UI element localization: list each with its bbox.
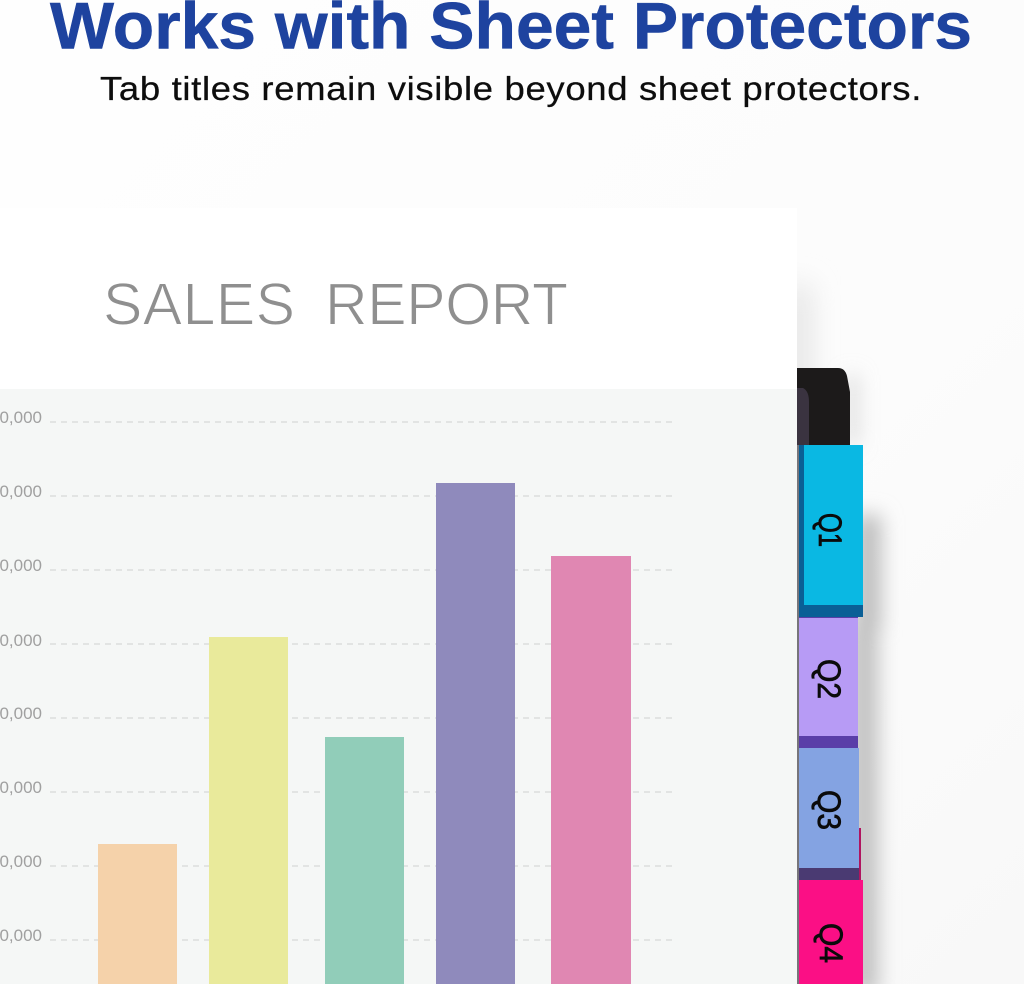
bar chart: 0,000 [0, 556, 42, 575]
black tab [797, 368, 850, 445]
tab shadows [848, 375, 881, 984]
tab Q4: Q4 [813, 923, 849, 963]
tab Q2 [799, 617, 858, 750]
tab Q1 [799, 445, 863, 617]
chart panel [0, 389, 797, 984]
sheet edge [797, 445, 799, 984]
tab Q3 [799, 748, 859, 880]
report page [0, 208, 797, 984]
bar chart: 0,000 [0, 852, 42, 871]
tab Q1: Q1 [812, 513, 848, 547]
report heading [103, 272, 568, 338]
bar chart: 0,000 [0, 631, 42, 650]
bar chart: 0,000 [0, 778, 42, 797]
bar chart: 0,000 [0, 482, 42, 501]
bar chart: 0,000 [0, 704, 42, 723]
tab Q4 [799, 828, 863, 984]
report heading: SALES [103, 272, 295, 338]
sheet shadow [786, 285, 810, 445]
tab Q3: Q3 [811, 790, 847, 830]
bar chart [0, 408, 672, 984]
tab Q2: Q2 [811, 659, 847, 699]
bar chart: 0,000 [0, 408, 42, 427]
bar chart: 0,000 [0, 926, 42, 945]
subtitle: Tab titles remain visible beyond sheet protectors. [100, 70, 922, 107]
report heading: REPORT [325, 272, 568, 338]
divider edge behind tabs [797, 388, 809, 445]
